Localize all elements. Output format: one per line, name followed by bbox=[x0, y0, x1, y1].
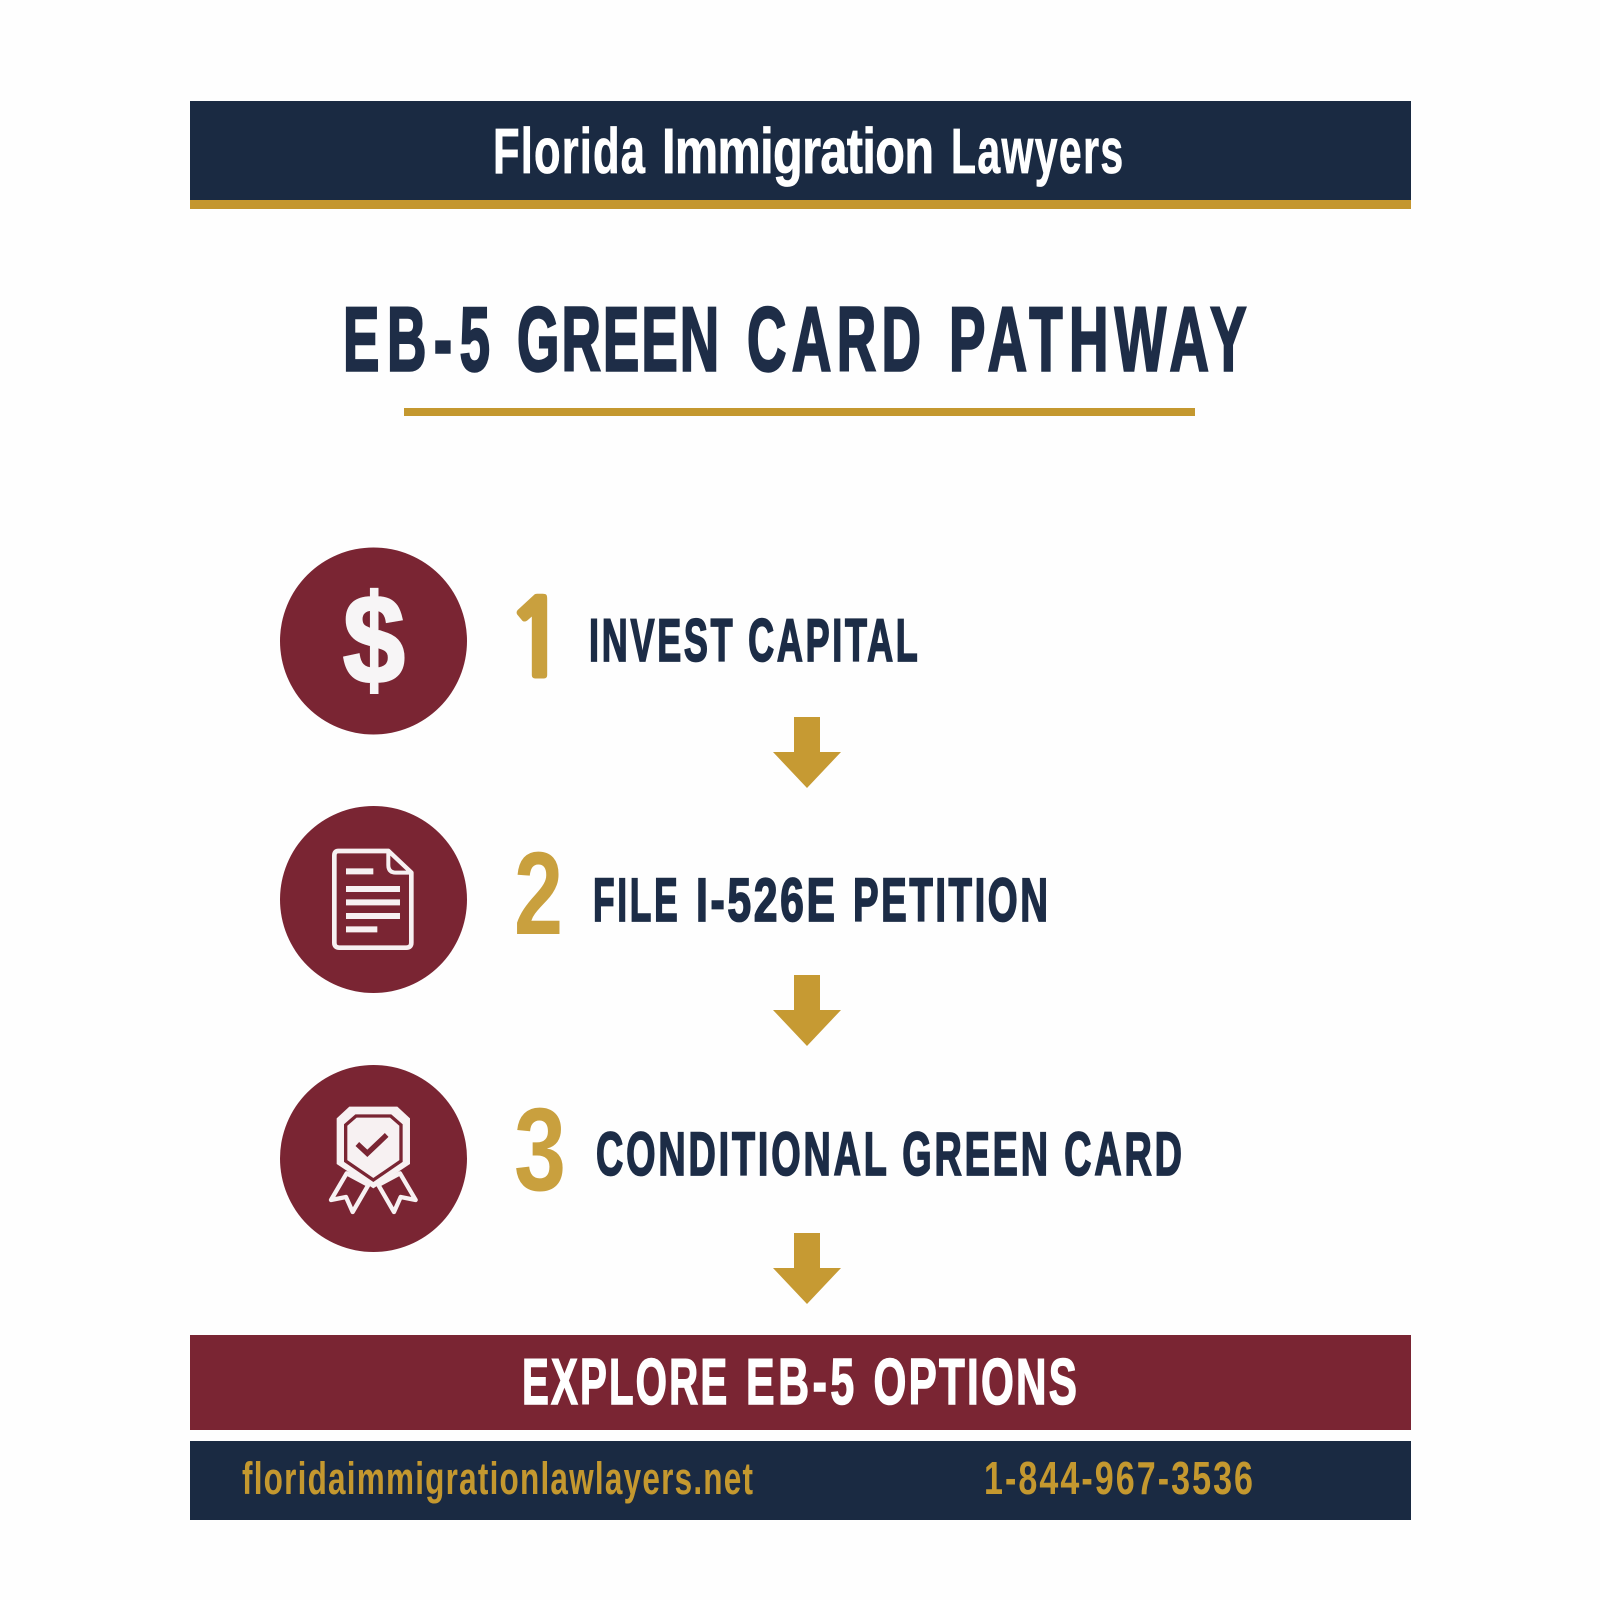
phone number: 1-844-967-3536 bbox=[984, 1452, 1253, 1504]
header firm name: Lawyers bbox=[951, 116, 1123, 187]
step 1: invest capital bbox=[280, 548, 918, 734]
step label 2: I-526E bbox=[696, 867, 835, 935]
website: floridaimmigrationlawlayers.net bbox=[242, 1455, 753, 1504]
icon: dollar sign in circle: $ bbox=[343, 570, 405, 711]
step label 1: INVEST CAPITAL bbox=[589, 608, 918, 674]
step label 2: PETITION bbox=[853, 866, 1048, 934]
icon: document in circle bbox=[280, 806, 467, 993]
header banner bbox=[190, 101, 1411, 209]
call to action banner bbox=[190, 1335, 1411, 1430]
arrow 3 bbox=[773, 1233, 841, 1304]
step number 2: 2 bbox=[514, 828, 563, 960]
main title: GREEN bbox=[517, 288, 719, 390]
step number 1: 1 bbox=[505, 587, 569, 692]
call to action banner: EXPLORE bbox=[522, 1346, 727, 1418]
step 2: file petition bbox=[280, 806, 1048, 993]
main title: EB-5 bbox=[343, 288, 490, 390]
arrow 1 bbox=[773, 717, 841, 788]
header firm name: Immigration bbox=[662, 117, 934, 188]
step label 3: CONDITIONAL GREEN CARD bbox=[596, 1120, 1182, 1188]
contact bar bbox=[190, 1441, 1411, 1520]
header firm name: Florida bbox=[493, 115, 645, 187]
arrow 2 bbox=[773, 975, 841, 1046]
call to action banner: OPTIONS bbox=[874, 1345, 1077, 1418]
call to action banner: EB-5 bbox=[746, 1345, 854, 1418]
step number 3: 3 bbox=[514, 1084, 566, 1216]
icon: certified badge in circle bbox=[280, 1065, 467, 1252]
main title: PATHWAY bbox=[949, 288, 1247, 390]
header firm name bbox=[493, 115, 1123, 188]
main title: CARD bbox=[747, 288, 921, 390]
main title bbox=[343, 288, 1247, 416]
step label 2: FILE bbox=[593, 866, 678, 934]
step 3: conditional green card bbox=[280, 1065, 1182, 1252]
icon: dollar sign in circle bbox=[280, 548, 467, 734]
step label 2 bbox=[593, 866, 1048, 935]
